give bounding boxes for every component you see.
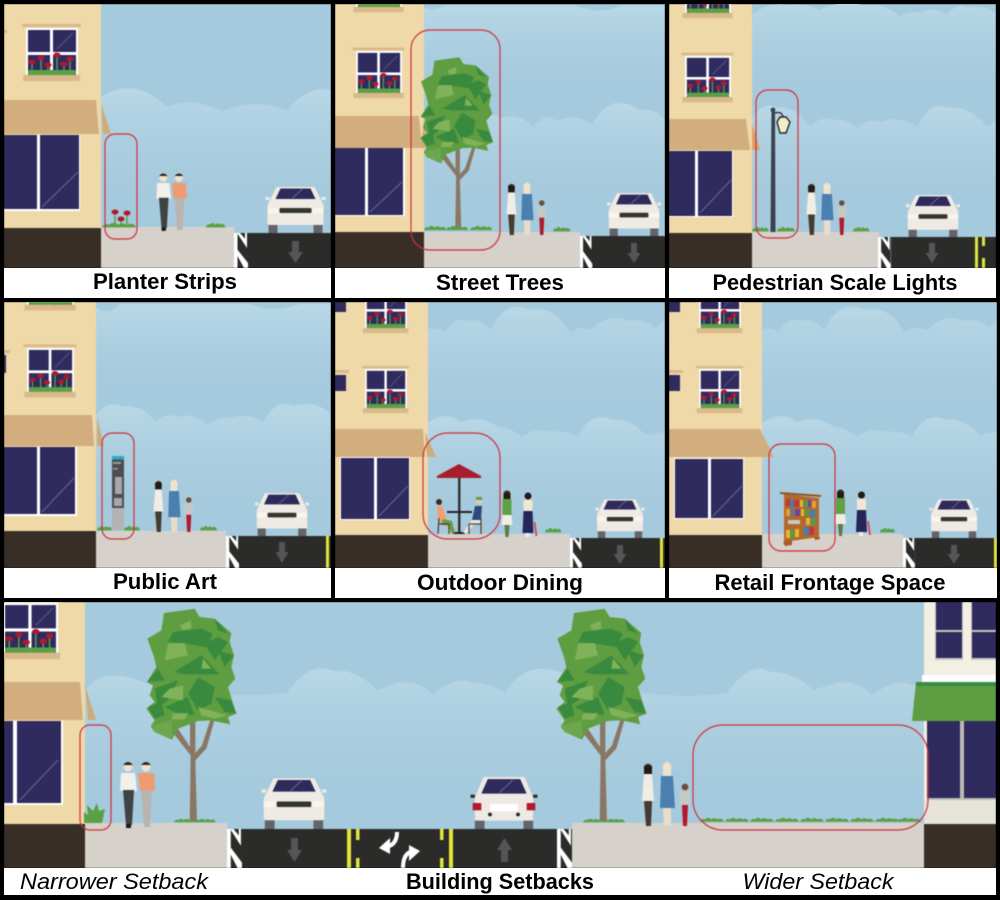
small shrub at narrow setback bbox=[84, 803, 105, 823]
bookshelf bbox=[780, 492, 821, 546]
sky bbox=[423, 4, 665, 237]
left tree bbox=[146, 609, 236, 822]
clouds bbox=[85, 668, 930, 800]
pedestrians bbox=[642, 762, 690, 826]
building bbox=[4, 302, 104, 568]
caption bbox=[669, 268, 996, 298]
highlight: wider setback bbox=[693, 725, 928, 830]
road bbox=[878, 237, 996, 268]
building bbox=[335, 286, 436, 568]
sidewalk bbox=[424, 232, 580, 268]
sidewalk bbox=[762, 534, 903, 568]
caption: Outdoor Dining bbox=[417, 570, 583, 595]
caption bar bbox=[4, 868, 996, 895]
pedestrians bbox=[835, 490, 870, 536]
shrub bbox=[880, 528, 895, 532]
caption: Public Art bbox=[113, 569, 218, 594]
caption: Retail Frontage Space bbox=[714, 570, 946, 595]
shrub bbox=[853, 227, 870, 231]
panel: planter strips bbox=[4, 4, 331, 298]
road bbox=[570, 538, 665, 568]
car bbox=[266, 187, 326, 233]
car bbox=[906, 195, 960, 237]
building bbox=[669, 0, 760, 268]
right building bbox=[912, 602, 996, 868]
pedestrians bbox=[156, 173, 187, 231]
left building bbox=[0, 599, 96, 868]
sky bbox=[95, 302, 331, 537]
street lamp bbox=[770, 108, 790, 232]
panel: building setbacks bbox=[0, 599, 996, 895]
caption bbox=[335, 268, 665, 298]
building bbox=[4, 4, 111, 268]
sky bbox=[4, 602, 996, 868]
car bbox=[595, 499, 645, 538]
clouds bbox=[101, 88, 331, 128]
pedestrians bbox=[506, 183, 546, 235]
pedestrians bbox=[154, 480, 193, 532]
road bbox=[580, 236, 665, 268]
car: rear view bbox=[471, 777, 537, 829]
caption: Planter Strips bbox=[93, 269, 237, 294]
sidewalk bbox=[101, 227, 234, 268]
highlight bbox=[411, 30, 500, 250]
panel: street trees bbox=[335, 0, 665, 298]
road bbox=[226, 536, 331, 568]
car: front view bbox=[262, 778, 326, 829]
public art kiosk bbox=[112, 456, 124, 530]
sidewalk bbox=[752, 232, 879, 268]
caption bbox=[335, 568, 665, 598]
highlight: narrower setback bbox=[80, 725, 111, 830]
road with lanes bbox=[227, 829, 572, 868]
right tree bbox=[556, 609, 646, 822]
median lines bbox=[347, 829, 453, 868]
panel: public art bbox=[4, 302, 331, 598]
car bbox=[929, 499, 979, 538]
sky bbox=[669, 302, 997, 568]
planting bbox=[97, 526, 140, 530]
caption: wider setback: Wider Setback bbox=[742, 869, 895, 894]
road bbox=[234, 233, 331, 268]
highlight bbox=[756, 90, 798, 238]
panel: retail frontage space bbox=[669, 286, 997, 598]
planter flowers bbox=[102, 210, 136, 227]
lane arrow: down bbox=[287, 838, 302, 862]
caption bbox=[4, 268, 331, 298]
shrub bbox=[200, 526, 217, 530]
highlight bbox=[105, 134, 137, 239]
sidewalk bbox=[96, 531, 226, 568]
shrub bbox=[206, 223, 226, 227]
left sidewalk bbox=[85, 823, 227, 868]
shrub bbox=[553, 227, 570, 231]
caption: Street Trees bbox=[436, 270, 564, 295]
clouds bbox=[762, 307, 997, 420]
sky bbox=[100, 4, 331, 234]
shrub bbox=[545, 528, 562, 532]
right sidewalk bbox=[572, 823, 924, 868]
panel: pedestrian scale lights bbox=[669, 0, 996, 298]
car bbox=[607, 193, 661, 236]
caption: Pedestrian Scale Lights bbox=[712, 270, 958, 295]
highlight bbox=[102, 433, 134, 539]
building bbox=[335, 0, 428, 268]
road bbox=[903, 538, 997, 568]
street tree bbox=[420, 57, 493, 230]
panel: outdoor dining bbox=[335, 286, 665, 598]
pedestrians bbox=[502, 490, 536, 537]
sky bbox=[335, 302, 665, 568]
clouds bbox=[428, 307, 665, 420]
pedestrians bbox=[806, 183, 846, 235]
highlight bbox=[423, 433, 500, 539]
clouds bbox=[424, 5, 665, 36]
pedestrians bbox=[120, 762, 155, 828]
building bbox=[669, 286, 774, 568]
caption: building setbacks: Building Setbacks bbox=[406, 869, 594, 894]
car bbox=[255, 493, 309, 536]
sidewalk bbox=[428, 534, 570, 568]
clouds bbox=[96, 304, 331, 335]
outdoor dining table bbox=[436, 464, 482, 534]
highlight bbox=[769, 444, 835, 551]
clouds bbox=[752, 4, 996, 34]
caption bbox=[4, 568, 331, 598]
turn arrows bbox=[386, 832, 414, 868]
planting bbox=[752, 227, 795, 231]
caption bbox=[669, 568, 997, 598]
caption: narrower setback: Narrower Setback bbox=[20, 869, 209, 894]
sky bbox=[751, 4, 996, 268]
lane arrow: up bbox=[497, 838, 512, 862]
planting strip at wide setback bbox=[700, 818, 921, 822]
